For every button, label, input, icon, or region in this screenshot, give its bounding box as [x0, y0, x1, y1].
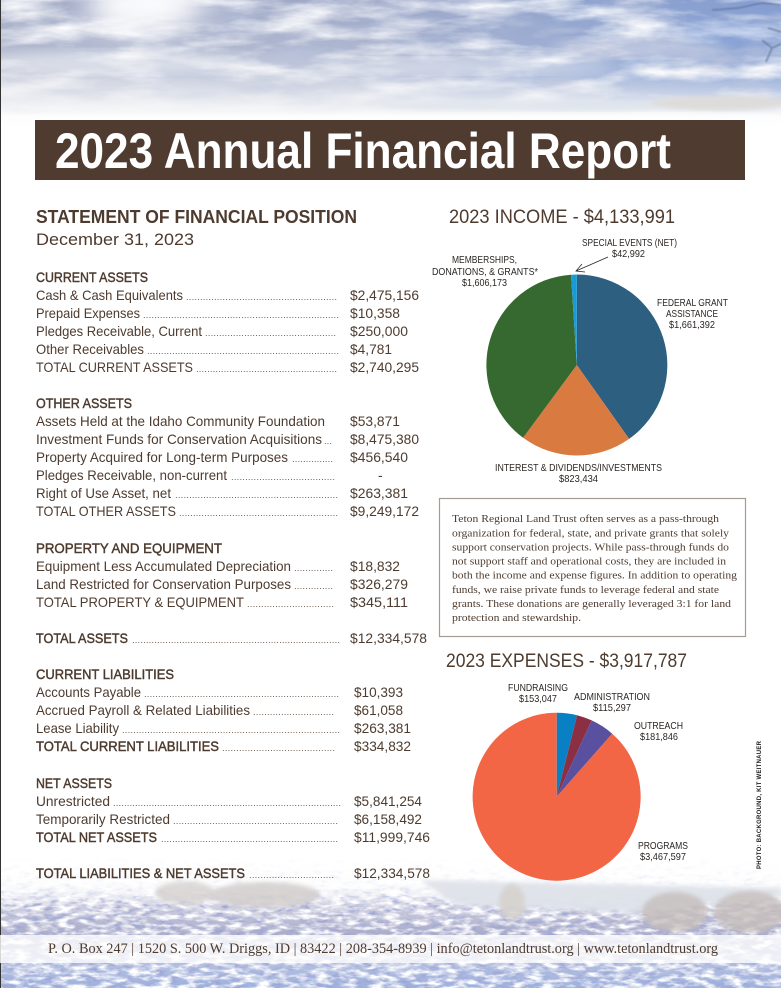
- row: property acquired: $456,540: [350, 449, 408, 465]
- row: accounts payable: ......................................................................: [144, 689, 339, 700]
- row: other receivables: Other Receivables: [36, 341, 144, 357]
- row: unrestricted: $5,841,254: [354, 793, 422, 809]
- row: accrued payroll: [36, 702, 403, 718]
- label: interest and dividends: $823,434: [559, 473, 598, 485]
- row: total current assets: $2,740,295: [350, 359, 419, 375]
- row: total assets: ...........................................................................: [132, 635, 340, 646]
- label: programs: $3,467,597: [640, 851, 686, 863]
- label: administration: $115,297: [593, 702, 631, 714]
- label: outreach: OUTREACH: [634, 720, 683, 732]
- callout: pass-through note: grants. These donations are generally leveraged 3:1 for land: [452, 598, 732, 610]
- row: total net assets: $11,999,746: [354, 829, 430, 845]
- section heading: net assets: NET ASSETS: [36, 775, 112, 791]
- left edge line: [0, 0, 1, 988]
- row: accrued payroll: .............................: [253, 707, 334, 718]
- row: investment funds: $8,475,380: [350, 431, 419, 447]
- row: total current assets: ...................................................: [196, 364, 337, 375]
- row: pledges non-current: [36, 467, 383, 483]
- row: total liabilities and net assets: [36, 865, 430, 881]
- row: accrued payroll: $61,058: [354, 702, 403, 718]
- date: December 31, 2023: [36, 230, 194, 249]
- row: equipment: ..............: [294, 563, 333, 574]
- callout: pass-through note: Teton Regional Land Trust often serves as a pass-through: [452, 513, 720, 525]
- row: total liabilities and net assets: TOTAL LIABILITIES & NET ASSETS: [36, 865, 245, 881]
- row: total assets: TOTAL ASSETS: [36, 630, 128, 646]
- row: temporarily restricted: $6,158,492: [354, 811, 422, 827]
- label: outreach: [634, 720, 683, 743]
- row: total property: [36, 594, 408, 610]
- label: memberships: [432, 254, 538, 289]
- row: unrestricted: [36, 793, 422, 809]
- pie chart: income: [486, 274, 667, 455]
- label: memberships: DONATIONS, & GRANTS*: [432, 266, 538, 278]
- row: prepaid: Prepaid Expenses: [36, 305, 140, 321]
- row: right of use: $263,381: [350, 485, 408, 501]
- row: cash: Cash & Cash Equivalents: [36, 287, 183, 303]
- row: lease liability: $263,381: [354, 720, 411, 736]
- row: accounts payable: Accounts Payable: [36, 684, 141, 700]
- footer contact band: P. O. Box 247 | 1520 S. 500 W. Driggs, ID | 83422 | 208-354-8939 | info@tetonlandtrust.org | www.tetonlandtrust.org: [48, 941, 718, 957]
- row: other receivables: .....................................................................: [147, 346, 339, 357]
- label: programs: PROGRAMS: [638, 840, 688, 852]
- row: unrestricted: ...................................................................................: [113, 798, 341, 809]
- row: accounts payable: $10,393: [354, 684, 403, 700]
- label: special events: SPECIAL EVENTS (NET): [582, 237, 677, 249]
- row: investment funds: Investment Funds for Conservation Acquisitions: [36, 431, 322, 447]
- row: cash: $2,475,156: [350, 287, 419, 303]
- heading: expenses: 2023 EXPENSES - $3,917,787: [446, 651, 687, 672]
- row: prepaid: ......................................................................: [143, 310, 339, 321]
- row: cash: ......................................................: [186, 292, 337, 303]
- row: temporarily restricted: [36, 811, 422, 827]
- row: total other assets: [36, 503, 419, 519]
- section heading: property and equipment: PROPERTY AND EQUIPMENT: [36, 540, 222, 556]
- label: federal grant: [657, 297, 728, 331]
- label: federal grant: ASSISTANCE: [666, 308, 718, 320]
- row: total net assets: [36, 829, 430, 845]
- row: investment funds: ...: [324, 436, 332, 447]
- row: total property: $345,111: [350, 594, 408, 610]
- row: other receivables: $4,781: [350, 341, 392, 357]
- row: total current liabilities: [36, 738, 411, 754]
- row: pledges non-current: -: [378, 467, 383, 483]
- row: total current assets: [36, 359, 419, 375]
- label: fundraising: FUNDRAISING: [508, 682, 568, 694]
- row: total assets: [36, 630, 427, 646]
- callout: pass-through note: organization for federal, state, and private grants that solely: [452, 528, 730, 540]
- footer contact band: [0, 935, 781, 963]
- row: pledges current: Pledges Receivable, Current: [36, 323, 202, 339]
- row: total net assets: ................................................................: [161, 834, 338, 845]
- row: right of use: [36, 485, 408, 501]
- row: land restricted: Land Restricted for Conservation Purposes: [36, 576, 291, 592]
- label: administration: [574, 691, 650, 714]
- row: accounts payable: [36, 684, 403, 700]
- row: pledges current: ...............................................: [205, 328, 336, 339]
- callout: pass-through note: support conservation projects. While pass-through funds do: [452, 542, 730, 554]
- section heading: current liabilities: CURRENT LIABILITIES: [36, 666, 174, 682]
- label: federal grant: $1,661,392: [669, 319, 715, 331]
- row: cash: [36, 287, 419, 303]
- label: special events: [582, 237, 677, 260]
- row: total other assets: .........................................................: [179, 508, 338, 519]
- panel: statement of financial position: [36, 207, 430, 881]
- row: right of use: ..........................................................: [175, 490, 338, 501]
- background photo: winter sky: [1, 0, 781, 114]
- row: lease liability: [36, 720, 411, 736]
- row: lease liability: Lease Liability: [36, 720, 119, 736]
- row: accrued payroll: Accrued Payroll & Related Liabilities: [36, 702, 250, 718]
- row: total current liabilities: ........................................: [222, 743, 335, 754]
- row: land restricted: ..............: [294, 581, 333, 592]
- row: pledges non-current: Pledges Receivable, non-current: [36, 467, 227, 483]
- row: equipment: Equipment Less Accumulated Depreciation: [36, 558, 291, 574]
- label: interest and dividends: INTEREST & DIVIDENDS/INVESTMENTS: [495, 462, 662, 474]
- row: total liabilities and net assets: $12,334,578: [354, 865, 430, 881]
- label: special events: $42,992: [612, 248, 645, 260]
- row: temporarily restricted: ...........................................................: [173, 816, 338, 827]
- arrow: special events: [576, 257, 608, 272]
- label: fundraising: $153,047: [519, 693, 557, 705]
- row: total current liabilities: TOTAL CURRENT LIABILITIES: [36, 738, 219, 754]
- photo credit: PHOTO: BACKGROUND, KIT WEITNAUER: [757, 740, 763, 869]
- row: prepaid: [36, 305, 400, 321]
- row: unrestricted: Unrestricted: [36, 793, 110, 809]
- label: fundraising: [508, 682, 568, 705]
- row: total other assets: $9,249,172: [350, 503, 419, 519]
- row: temporarily restricted: Temporarily Restricted: [36, 811, 170, 827]
- label: programs: [638, 840, 688, 863]
- panel: expenses: [446, 651, 688, 881]
- label: interest and dividends: [495, 462, 662, 485]
- row: total net assets: TOTAL NET ASSETS: [36, 829, 157, 845]
- heading: income: 2023 INCOME - $4,133,991: [449, 207, 675, 228]
- row: lease liability: ..............................................................................: [122, 725, 340, 736]
- row: land restricted: $326,279: [350, 576, 408, 592]
- row: other receivables: [36, 341, 392, 357]
- row: prepaid: $10,358: [350, 305, 400, 321]
- row: right of use: Right of Use Asset, net: [36, 485, 171, 501]
- section heading: current assets: CURRENT ASSETS: [36, 269, 148, 285]
- row: idaho community foundation: $53,871: [350, 413, 400, 429]
- label: outreach: $181,846: [640, 731, 678, 743]
- label: memberships: MEMBERSHIPS,: [452, 254, 517, 266]
- row: idaho community foundation: Assets Held at the Idaho Community Foundation: [36, 413, 325, 429]
- row: property acquired: Property Acquired for Long-term Purposes: [36, 449, 288, 465]
- row: total other assets: TOTAL OTHER ASSETS: [36, 503, 176, 519]
- row: total current liabilities: $334,832: [354, 738, 411, 754]
- label: administration: ADMINISTRATION: [574, 691, 650, 703]
- heading: statement: STATEMENT OF FINANCIAL POSITION: [36, 207, 357, 227]
- background photo: snowy field: [1, 870, 781, 988]
- row: pledges non-current: .....................................: [231, 472, 335, 483]
- callout: pass-through note: funds, we raise private funds to leverage federal and state: [452, 584, 719, 596]
- title banner: 2023 Annual Financial Report: [55, 123, 671, 179]
- panel: income: [432, 207, 728, 485]
- label: federal grant: FEDERAL GRANT: [657, 297, 728, 309]
- pie chart: expenses: [473, 713, 641, 881]
- row: total property: TOTAL PROPERTY & EQUIPMENT: [36, 594, 244, 610]
- row: total assets: $12,334,578: [350, 630, 427, 646]
- section heading: other assets: OTHER ASSETS: [36, 395, 132, 411]
- row: pledges current: $250,000: [350, 323, 408, 339]
- row: total liabilities and net assets: ..............................: [249, 870, 334, 881]
- row: pledges current: [36, 323, 408, 339]
- callout: pass-through note: protection and stewardship.: [452, 612, 581, 624]
- row: total property: ...............................: [247, 599, 334, 610]
- callout: pass-through note: not support staff and operational costs, they are included in: [452, 556, 727, 568]
- label: memberships: $1,606,173: [462, 277, 507, 289]
- callout: pass-through note: both the income and expense figures. In addition to operating: [452, 570, 738, 582]
- row: total current assets: TOTAL CURRENT ASSETS: [36, 359, 193, 375]
- row: property acquired: ...............: [292, 454, 333, 465]
- callout: pass-through note: [440, 498, 746, 636]
- row: equipment: $18,832: [350, 558, 400, 574]
